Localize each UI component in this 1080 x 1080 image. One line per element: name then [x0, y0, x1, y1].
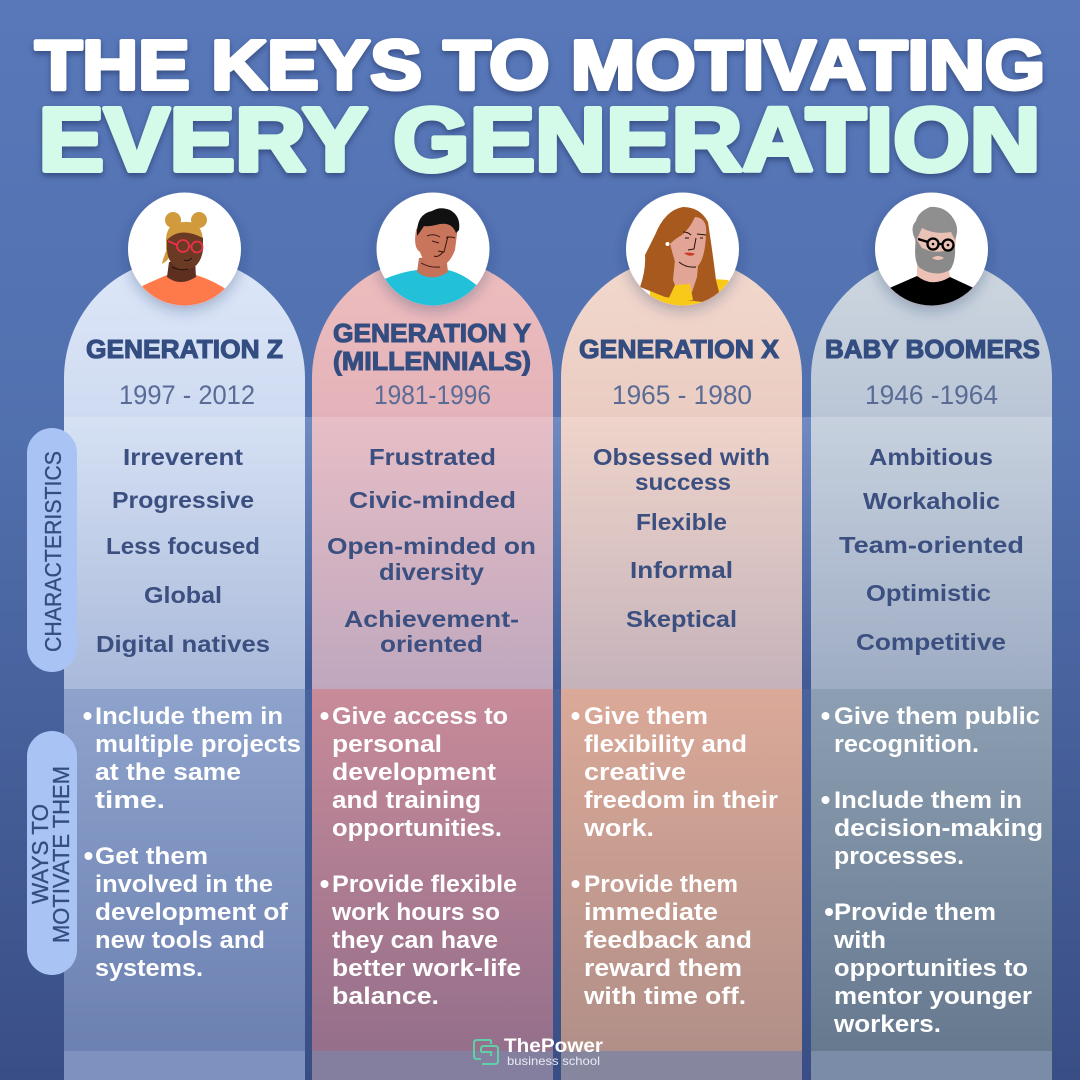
ways to motivate X: immediate: [584, 899, 718, 926]
motivation band Boomers: [811, 689, 1052, 1051]
ways to motivate X: with time off.: [583, 983, 746, 1010]
title: THE KEYS TO MOTIVATING: [35, 26, 1045, 104]
characteristics band Z: [64, 417, 305, 689]
ways to motivate X: reward them: [584, 955, 742, 982]
ways to motivate Boomers: opportunities to: [834, 955, 1028, 982]
arch header Boomers: [811, 258, 1052, 417]
motivation band Z: [64, 689, 305, 1051]
ways to motivate Boomers: recognition.: [834, 731, 979, 758]
ways to motivate X: Give them: [584, 703, 708, 730]
characteristics Z: [96, 444, 270, 657]
panel: Generation X: [561, 192, 802, 1080]
characteristics Boomers: Ambitious: [869, 444, 993, 470]
heading Y: [333, 318, 531, 376]
ways to motivate X: work.: [583, 815, 654, 842]
characteristics Z: Digital natives: [96, 631, 270, 657]
ways to motivate Y: Give access to: [332, 703, 508, 730]
characteristics Boomers: Optimistic: [866, 580, 991, 606]
characteristics band Y: [312, 417, 553, 689]
ways to motivate Y: opportunities.: [332, 815, 502, 842]
ways to motivate Z: involved in the: [95, 871, 273, 898]
heading X: GENERATION X: [579, 334, 780, 364]
characteristics X: Skeptical: [626, 606, 737, 632]
characteristics X: [593, 444, 770, 632]
ways to motivate X: feedback and: [584, 927, 752, 954]
motivation band Y: [312, 689, 553, 1051]
heading Y: (MILLENNIALS): [333, 346, 531, 376]
panel: Generation Z: [64, 192, 305, 1080]
ways to motivate X: freedom in their: [584, 787, 778, 814]
characteristics Z: Progressive: [112, 487, 254, 513]
side label: characteristics: CHARACTERISTICS: [40, 451, 66, 652]
characteristics Z: Less focused: [106, 533, 260, 559]
heading Z: GENERATION Z: [86, 334, 283, 364]
characteristics X: success: [635, 469, 731, 495]
logo: ThePower business school: [474, 1036, 604, 1068]
arch header Z: [64, 258, 305, 417]
avatar X: [626, 192, 739, 310]
ways to motivate X: Provide them: [584, 871, 738, 898]
characteristics Z: Irreverent: [123, 444, 243, 470]
characteristics band X: [561, 417, 802, 689]
characteristics X: Obsessed with: [593, 444, 770, 470]
arch header Y: [312, 258, 553, 417]
characteristics Boomers: Team-oriented: [839, 532, 1024, 558]
title: [35, 26, 1045, 190]
characteristics Boomers: Workaholic: [863, 488, 1000, 514]
side label: ways to motivate them: WAYS TO: [27, 804, 53, 904]
ways to motivate Y: [320, 703, 521, 1010]
avatar Boomers: [875, 192, 988, 310]
ways to motivate X: creative: [584, 759, 686, 786]
ways to motivate Z: [84, 703, 301, 982]
ways to motivate X: [572, 703, 778, 1010]
characteristics Boomers: [839, 444, 1024, 655]
side label: characteristics: [27, 428, 77, 672]
ways to motivate Y: and training: [332, 787, 481, 814]
avatar Z: [128, 192, 241, 310]
characteristics Y: Civic-minded: [349, 487, 516, 513]
years X: 1965 - 1980: [612, 380, 752, 410]
ways to motivate Y: Provide flexible: [332, 871, 517, 898]
characteristics X: Flexible: [636, 509, 727, 535]
years Boomers: 1946 -1964: [865, 380, 998, 410]
characteristics Y: Frustrated: [369, 444, 496, 470]
ways to motivate Boomers: with: [833, 927, 886, 954]
title: EVERY GENERATION: [38, 90, 1040, 190]
ways to motivate Y: they can have: [332, 927, 498, 954]
arch header X: [561, 258, 802, 417]
years Z: 1997 - 2012: [119, 380, 255, 410]
ways to motivate Boomers: processes.: [834, 843, 964, 870]
logo: ThePower business school: ThePower: [504, 1036, 604, 1057]
ways to motivate Boomers: workers.: [833, 1011, 941, 1038]
logo: ThePower business school: business school: [507, 1054, 600, 1068]
characteristics Y: Achievement-: [344, 606, 519, 632]
heading Y: GENERATION Y: [333, 318, 531, 348]
ways to motivate X: flexibility and: [584, 731, 747, 758]
ways to motivate Z: at the same: [95, 759, 241, 786]
side label: ways to motivate them: [27, 731, 77, 975]
ways to motivate Boomers: Include them in: [834, 787, 1022, 814]
characteristics Y: Open-minded on: [327, 533, 536, 559]
characteristics X: Informal: [630, 557, 733, 583]
characteristics Y: diversity: [379, 559, 484, 585]
ways to motivate Boomers: mentor younger: [834, 983, 1032, 1010]
ways to motivate Y: work hours so: [331, 899, 500, 926]
ways to motivate Z: new tools and: [95, 927, 265, 954]
ways to motivate Z: Include them in: [95, 703, 283, 730]
side label: ways to motivate them: MOTIVATE THEM: [48, 766, 74, 943]
panel: Baby Boomers: [811, 192, 1052, 1080]
ways to motivate Y: personal: [332, 731, 442, 758]
panel: Generation Y: [312, 192, 553, 1080]
ways to motivate Z: time.: [95, 787, 165, 814]
motivation band X: [561, 689, 802, 1051]
ways to motivate Boomers: [822, 703, 1043, 1038]
avatar Y: [376, 192, 490, 310]
ways to motivate Boomers: decision-making: [834, 815, 1043, 842]
ways to motivate Y: development: [332, 759, 496, 786]
characteristics Boomers: Competitive: [856, 629, 1006, 655]
heading Boomers: BABY BOOMERS: [825, 334, 1040, 364]
ways to motivate Z: Get them: [95, 843, 208, 870]
characteristics Y: [327, 444, 536, 657]
ways to motivate Y: balance.: [332, 983, 439, 1010]
ways to motivate Boomers: Provide them: [834, 899, 996, 926]
years Y: 1981-1996: [374, 380, 491, 410]
characteristics band Boomers: [811, 417, 1052, 689]
ways to motivate Z: multiple projects: [95, 731, 301, 758]
ways to motivate Z: systems.: [95, 955, 203, 982]
characteristics Y: oriented: [380, 631, 483, 657]
ways to motivate Boomers: Give them public: [834, 703, 1040, 730]
ways to motivate Z: development of: [95, 899, 289, 926]
characteristics Z: Global: [144, 582, 222, 608]
ways to motivate Y: better work-life: [332, 955, 521, 982]
